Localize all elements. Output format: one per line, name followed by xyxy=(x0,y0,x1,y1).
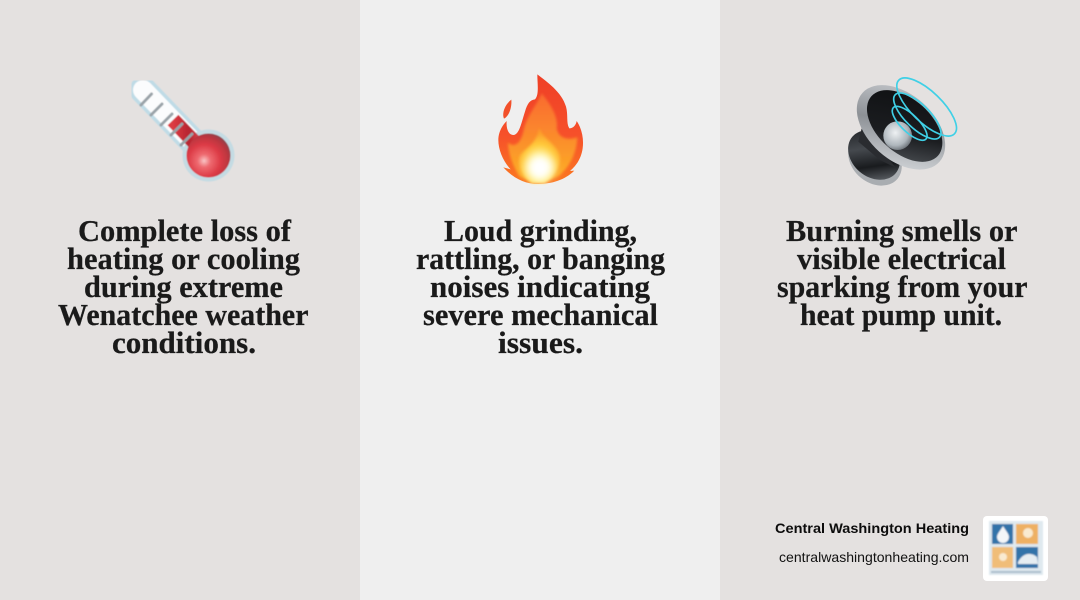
heading: panel 1 text: Wenatchee weather xyxy=(58,297,309,332)
icon: speaker xyxy=(838,68,965,196)
heading: panel 3 text: visible electrical xyxy=(797,241,1006,276)
heading: panel 2 text: issues. xyxy=(498,325,583,360)
logo xyxy=(983,516,1048,581)
heading: panel 3 text: heat pump unit. xyxy=(800,297,1002,332)
panel: grinding noises xyxy=(360,0,720,600)
footer: website: centralwashingtonheating.com xyxy=(779,549,969,565)
heading: panel 3 text: sparking from your xyxy=(777,269,1028,304)
icon: flame xyxy=(498,74,583,184)
heading: panel 1 text: conditions. xyxy=(112,325,256,360)
footer: company name: Central Washington Heating xyxy=(775,520,969,536)
heading: panel 3 text: Burning smells or xyxy=(786,213,1018,248)
icon: thermometer xyxy=(141,90,234,182)
heading: panel 1 text: heating or cooling xyxy=(67,241,300,276)
heading: panel 1 text: Complete loss of xyxy=(78,213,292,248)
panel: burning smells xyxy=(720,0,1080,600)
heading: panel 2 text: rattling, or banging xyxy=(416,241,665,276)
panel: complete loss of heating or cooling xyxy=(0,0,360,600)
heading: panel 2 text: severe mechanical xyxy=(423,297,658,332)
heading: panel 2 text: noises indicating xyxy=(430,269,650,304)
heading: panel 1 text: during extreme xyxy=(84,269,283,304)
heading: panel 2 text: Loud grinding, xyxy=(444,213,637,248)
